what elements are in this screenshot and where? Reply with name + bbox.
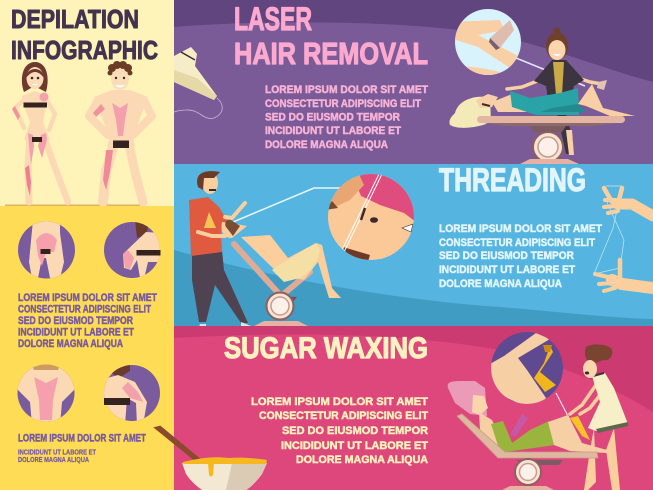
- text block: SED DO EIUSMOD TEMPOR: [265, 112, 400, 124]
- text block: first paragraph: INCIDIDUNT UT LABORE ET: [18, 326, 134, 338]
- callout line: [516, 58, 585, 86]
- title: DEPILATION: [11, 4, 139, 34]
- text block: LOREM IPSUM DOLOR SIT AMET: [251, 396, 428, 408]
- heading: SUGAR WAXING: [224, 332, 428, 365]
- text block: first paragraph: CONSECTETUR ADIPISCING ELIT: [18, 304, 151, 316]
- text block: [251, 396, 428, 466]
- text block: INCIDIDUNT UT LABORE ET: [281, 440, 428, 452]
- therapist: [507, 28, 607, 155]
- text block: first paragraph: DOLORE MAGNA ALIQUA: [18, 338, 123, 350]
- callout line: [233, 188, 345, 222]
- client on threading chair: [221, 220, 341, 326]
- heading: HAIR REMOVAL: [234, 36, 428, 71]
- male figure: [89, 61, 152, 202]
- text block: LOREM IPSUM DOLOR SIT AMET: [265, 84, 428, 96]
- text block: SED DO EIUSMOD TEMPOR: [282, 425, 428, 437]
- text block: CONSECTETUR ADIPISCING ELIT: [439, 237, 595, 249]
- icon: hands with thread: [594, 186, 653, 291]
- heading: [234, 1, 428, 71]
- text block: DOLORE MAGNA ALIQUA: [296, 454, 428, 466]
- icon: sugar paste bowl with spatula: [156, 427, 267, 490]
- text block: [439, 223, 602, 290]
- text block: second paragraph: DOLORE MAGNA ALIQUA: [18, 455, 89, 464]
- callout line: [556, 393, 570, 420]
- text block: second paragraph: LOREM IPSUM DOLOR SIT AMET: [18, 432, 146, 444]
- panel: yellow details column: [0, 206, 174, 490]
- icon: male torso circle: [18, 364, 74, 422]
- heading: THREADING: [439, 162, 586, 198]
- text block: SED DO EIUSMOD TEMPOR: [439, 250, 574, 262]
- text block: DOLORE MAGNA ALIQUA: [265, 139, 388, 151]
- panel: figures on cream background: [0, 0, 174, 206]
- text block: DOLORE MAGNA ALIQUA: [439, 278, 562, 290]
- heading: LASER: [234, 1, 312, 37]
- text block: first paragraph: [18, 292, 157, 350]
- zoom circle: laser on leg: [455, 9, 521, 75]
- panel: threading: [174, 162, 653, 327]
- title: INFOGRAPHIC: [11, 35, 158, 65]
- text block: first paragraph: LOREM IPSUM DOLOR SIT AMET: [18, 292, 157, 304]
- text block: second paragraph: [18, 432, 146, 464]
- text block: CONSECTETUR ADIPISCING ELIT: [259, 410, 428, 422]
- icon: laser device: [174, 47, 222, 118]
- icon: arm and shoulder circle: [104, 220, 162, 279]
- panel: laser hair removal: [174, 0, 653, 164]
- text block: INCIDIDUNT UT LABORE ET: [439, 264, 575, 276]
- icon: bikini area circle: [18, 220, 75, 278]
- text block: CONSECTETUR ADIPISCING ELIT: [265, 98, 421, 110]
- threading technician: [189, 171, 251, 327]
- female figure: [12, 62, 68, 202]
- text block: LOREM IPSUM DOLOR SIT AMET: [439, 223, 602, 235]
- text block: INCIDIDUNT UT LABORE ET: [265, 125, 401, 137]
- panel: sugar waxing: [156, 326, 653, 490]
- patient on laser table: [449, 84, 635, 164]
- text block: second paragraph: INCIDIDUNT UT LABORE ET: [18, 448, 96, 456]
- text block: [265, 84, 428, 151]
- title: [11, 4, 158, 65]
- text block: first paragraph: SED DO EIUSMOD TEMPOR: [18, 315, 133, 327]
- ground strip: [5, 204, 140, 206]
- beautician: [570, 344, 628, 490]
- icon: underarm circle: [104, 365, 160, 421]
- zoom circle: waxing strip: [488, 332, 563, 406]
- zoom circle: threading on brow: [328, 174, 414, 260]
- client on waxing chair: [448, 381, 607, 490]
